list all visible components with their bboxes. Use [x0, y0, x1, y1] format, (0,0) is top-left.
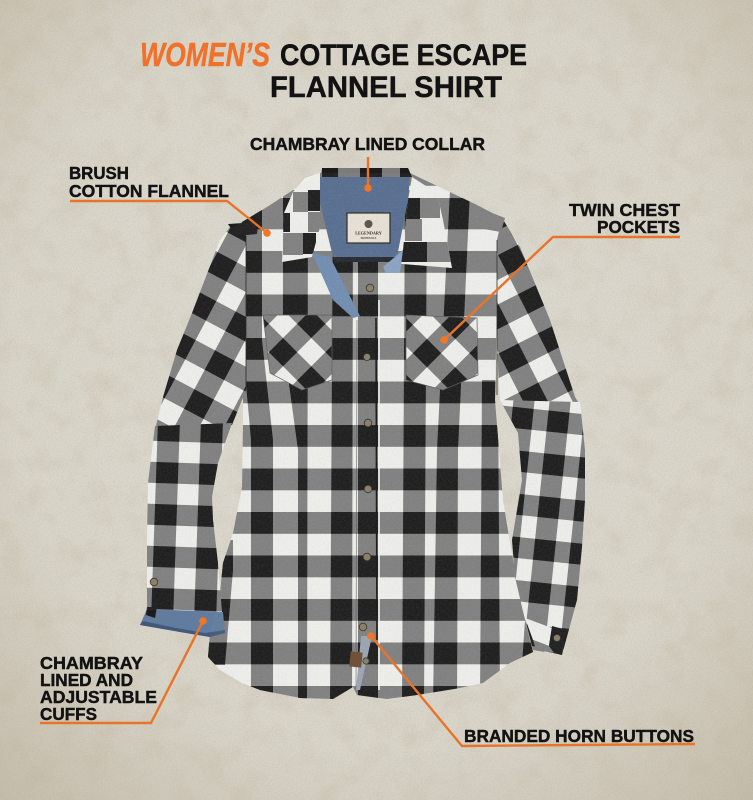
button placket — [356, 300, 379, 690]
left cuff: chambray — [140, 609, 225, 637]
woven neck label — [347, 213, 390, 243]
right collar leaf — [401, 177, 452, 268]
callout: chambray lined collar: CHAMBRAY LINED COLLAR — [250, 134, 485, 154]
callout: chambray lined and adjustable cuffs: CUFFS — [40, 704, 97, 724]
left shoulder seam — [228, 222, 258, 236]
woven neck label: LEGENDARY — [355, 230, 382, 236]
right chambray lapel — [383, 250, 403, 273]
callout: chambray lined and adjustable cuffs: CHAMBRAY — [40, 653, 143, 673]
collar neck shadow — [333, 257, 397, 262]
callout: chambray lined and adjustable cuffs: LINED AND — [40, 670, 133, 690]
right cuff tab — [525, 618, 566, 655]
collar back band — [320, 168, 412, 178]
callout: chambray lined collar — [250, 134, 485, 192]
flannel shirt illustration — [135, 165, 590, 705]
right forearm sleeve — [500, 400, 585, 655]
callout: twin chest pockets: TWIN CHEST — [569, 200, 680, 220]
title word: women's: WOMEN’S — [140, 36, 270, 73]
shirt body — [200, 165, 545, 705]
callout: branded horn buttons — [367, 632, 695, 746]
callout: brush cotton flannel: COTTON FLANNEL — [69, 181, 229, 201]
left collar leaf — [282, 173, 320, 262]
callout: brush cotton flannel: BRUSH — [69, 163, 129, 183]
right upper sleeve — [497, 218, 580, 433]
cuff shadow — [140, 621, 225, 637]
left chest pocket — [263, 315, 332, 390]
band dark checks — [322, 168, 412, 177]
title — [140, 36, 527, 104]
callout: brush cotton flannel — [69, 163, 271, 237]
callout: twin chest pockets — [440, 200, 680, 344]
title line two: FLANNEL SHIRT — [270, 71, 502, 104]
sleeve seam shadows — [246, 236, 497, 395]
right chest pocket — [406, 315, 478, 390]
callout: twin chest pockets: POCKETS — [597, 217, 680, 237]
woven neck label: WHITETAILS — [361, 236, 377, 240]
flannel fabric texture — [135, 165, 590, 705]
callout: chambray lined and adjustable cuffs — [40, 617, 207, 724]
callout: branded horn buttons: BRANDED HORN BUTTONS — [464, 726, 694, 746]
left upper sleeve — [155, 227, 246, 430]
horn buttons — [150, 284, 560, 664]
label crest — [364, 220, 372, 228]
leather placket patch — [349, 651, 363, 668]
left cuff black fold — [146, 607, 157, 618]
right shoulder seam — [474, 206, 505, 232]
chambray collar lining — [320, 177, 410, 257]
left forearm sleeve — [147, 423, 232, 612]
callout: chambray lined and adjustable cuffs: ADJUSTABLE — [40, 687, 157, 707]
title line one: COTTAGE ESCAPE — [280, 39, 527, 72]
left chambray lapel — [312, 253, 360, 318]
